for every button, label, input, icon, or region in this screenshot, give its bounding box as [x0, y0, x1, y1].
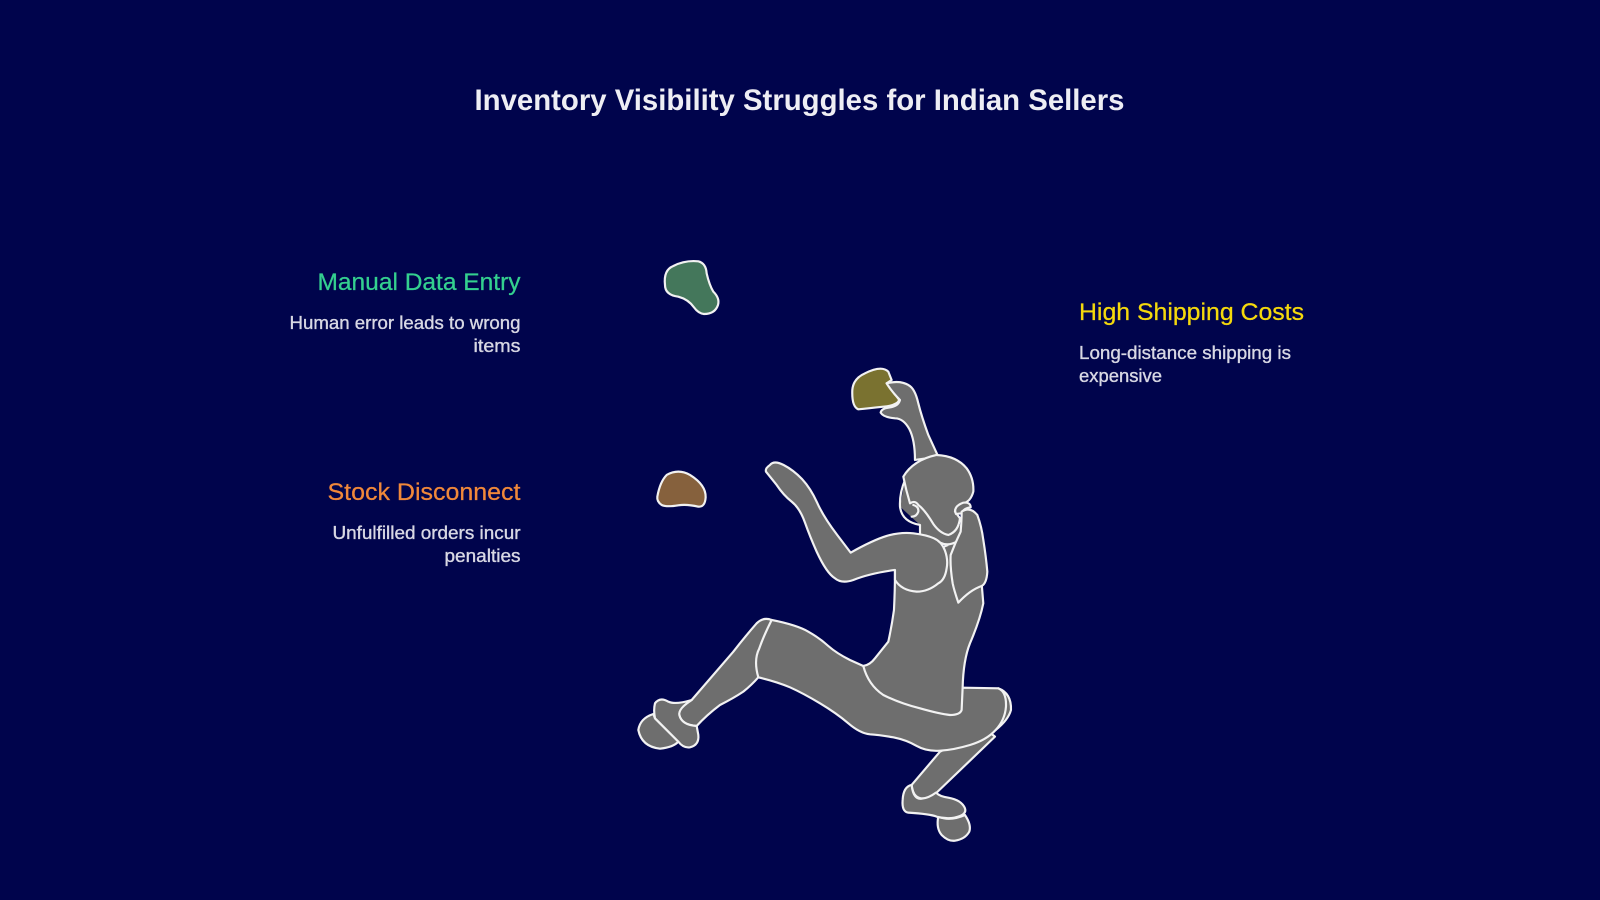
- head group: [900, 455, 987, 603]
- left foot: [654, 700, 698, 747]
- left arm group: [766, 462, 947, 592]
- heading: Stock Disconnect: Stock Disconnect: [328, 479, 521, 506]
- icon: orange climbing hold: [657, 472, 706, 507]
- torso: [863, 540, 983, 715]
- neck fill: [900, 480, 963, 547]
- description: Stock Disconnect: Unfulfilled orders incur: [332, 523, 521, 543]
- raised arm group: [852, 369, 938, 460]
- illustration: climber and holds: [638, 261, 1011, 841]
- heading: High Shipping Costs: High Shipping Costs: [1079, 299, 1304, 326]
- hair bun: [955, 503, 971, 514]
- ear: [912, 505, 918, 517]
- strap: [940, 541, 957, 544]
- description: High Shipping Costs: Long-distance shipping is: [1079, 343, 1291, 363]
- lower body: [638, 540, 1011, 841]
- right hold: [938, 815, 970, 841]
- hip and thigh: [756, 620, 1006, 751]
- icon: green climbing hold: [665, 261, 718, 314]
- text block: High Shipping Costs: [1079, 299, 1304, 386]
- icon: olive climbing hold: [852, 369, 899, 409]
- right lower leg: [912, 730, 995, 798]
- heading: Manual Data Entry: Manual Data Entry: [318, 269, 520, 296]
- left lower leg: [679, 619, 772, 726]
- description: High Shipping Costs: expensive: [1079, 366, 1162, 386]
- description: Stock Disconnect: penalties: [444, 546, 520, 566]
- face and neck outline: [900, 480, 920, 535]
- raised arm and hand: [881, 382, 938, 460]
- description: Manual Data Entry: items: [474, 336, 520, 356]
- hair: [903, 455, 973, 535]
- outer hip fold: [996, 688, 1011, 730]
- left arm and shoulder: [766, 462, 947, 592]
- title: Inventory Visibility Struggles for Indian Sellers: [474, 84, 1124, 117]
- text block: Manual Data Entry: [290, 269, 520, 356]
- ponytail: [951, 509, 987, 603]
- description: Manual Data Entry: Human error leads to wrong: [290, 313, 520, 333]
- left hold: [638, 714, 678, 749]
- right foot: [903, 785, 965, 818]
- text block: Stock Disconnect: [328, 479, 521, 566]
